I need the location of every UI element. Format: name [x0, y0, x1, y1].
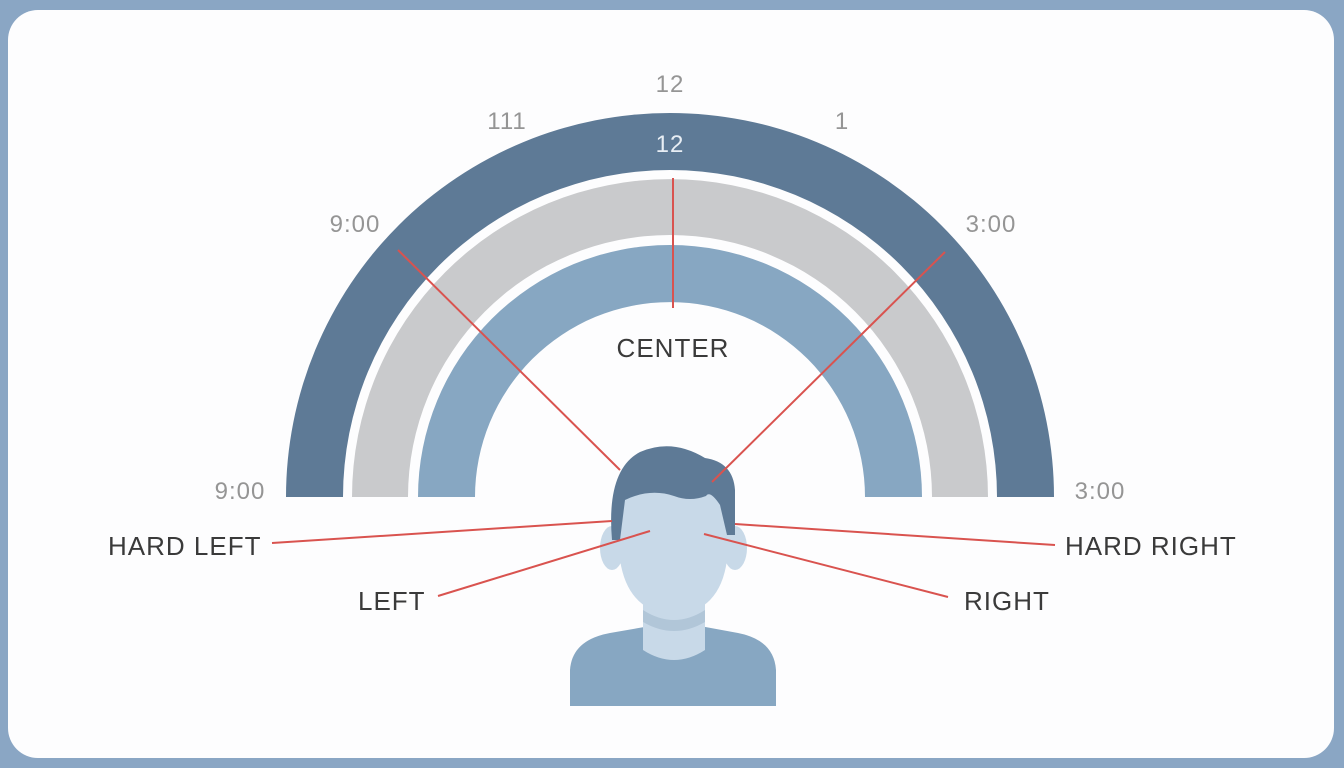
clock labels: 9:00	[215, 478, 265, 505]
clock labels: 3:00	[966, 211, 1016, 238]
clock labels: 12	[656, 71, 684, 98]
clock labels: 1	[835, 108, 849, 135]
clock labels: 111	[487, 108, 527, 135]
arc: outer dark band	[286, 113, 1054, 497]
clock labels: 12	[656, 131, 684, 158]
arc: middle gray band	[352, 179, 988, 497]
direction labels: CENTER	[617, 333, 729, 363]
direction labels: HARD RIGHT	[1065, 531, 1237, 561]
clock labels: 3:00	[1075, 478, 1125, 505]
red pointer lines	[272, 178, 1055, 597]
direction labels: HARD LEFT	[108, 531, 261, 561]
direction labels	[108, 333, 1237, 616]
clock labels: 9:00	[330, 211, 380, 238]
direction labels: RIGHT	[964, 586, 1050, 616]
arc: inner blue band	[418, 245, 922, 497]
clock labels	[215, 71, 1125, 505]
direction labels: LEFT	[358, 586, 426, 616]
person icon	[570, 446, 776, 706]
